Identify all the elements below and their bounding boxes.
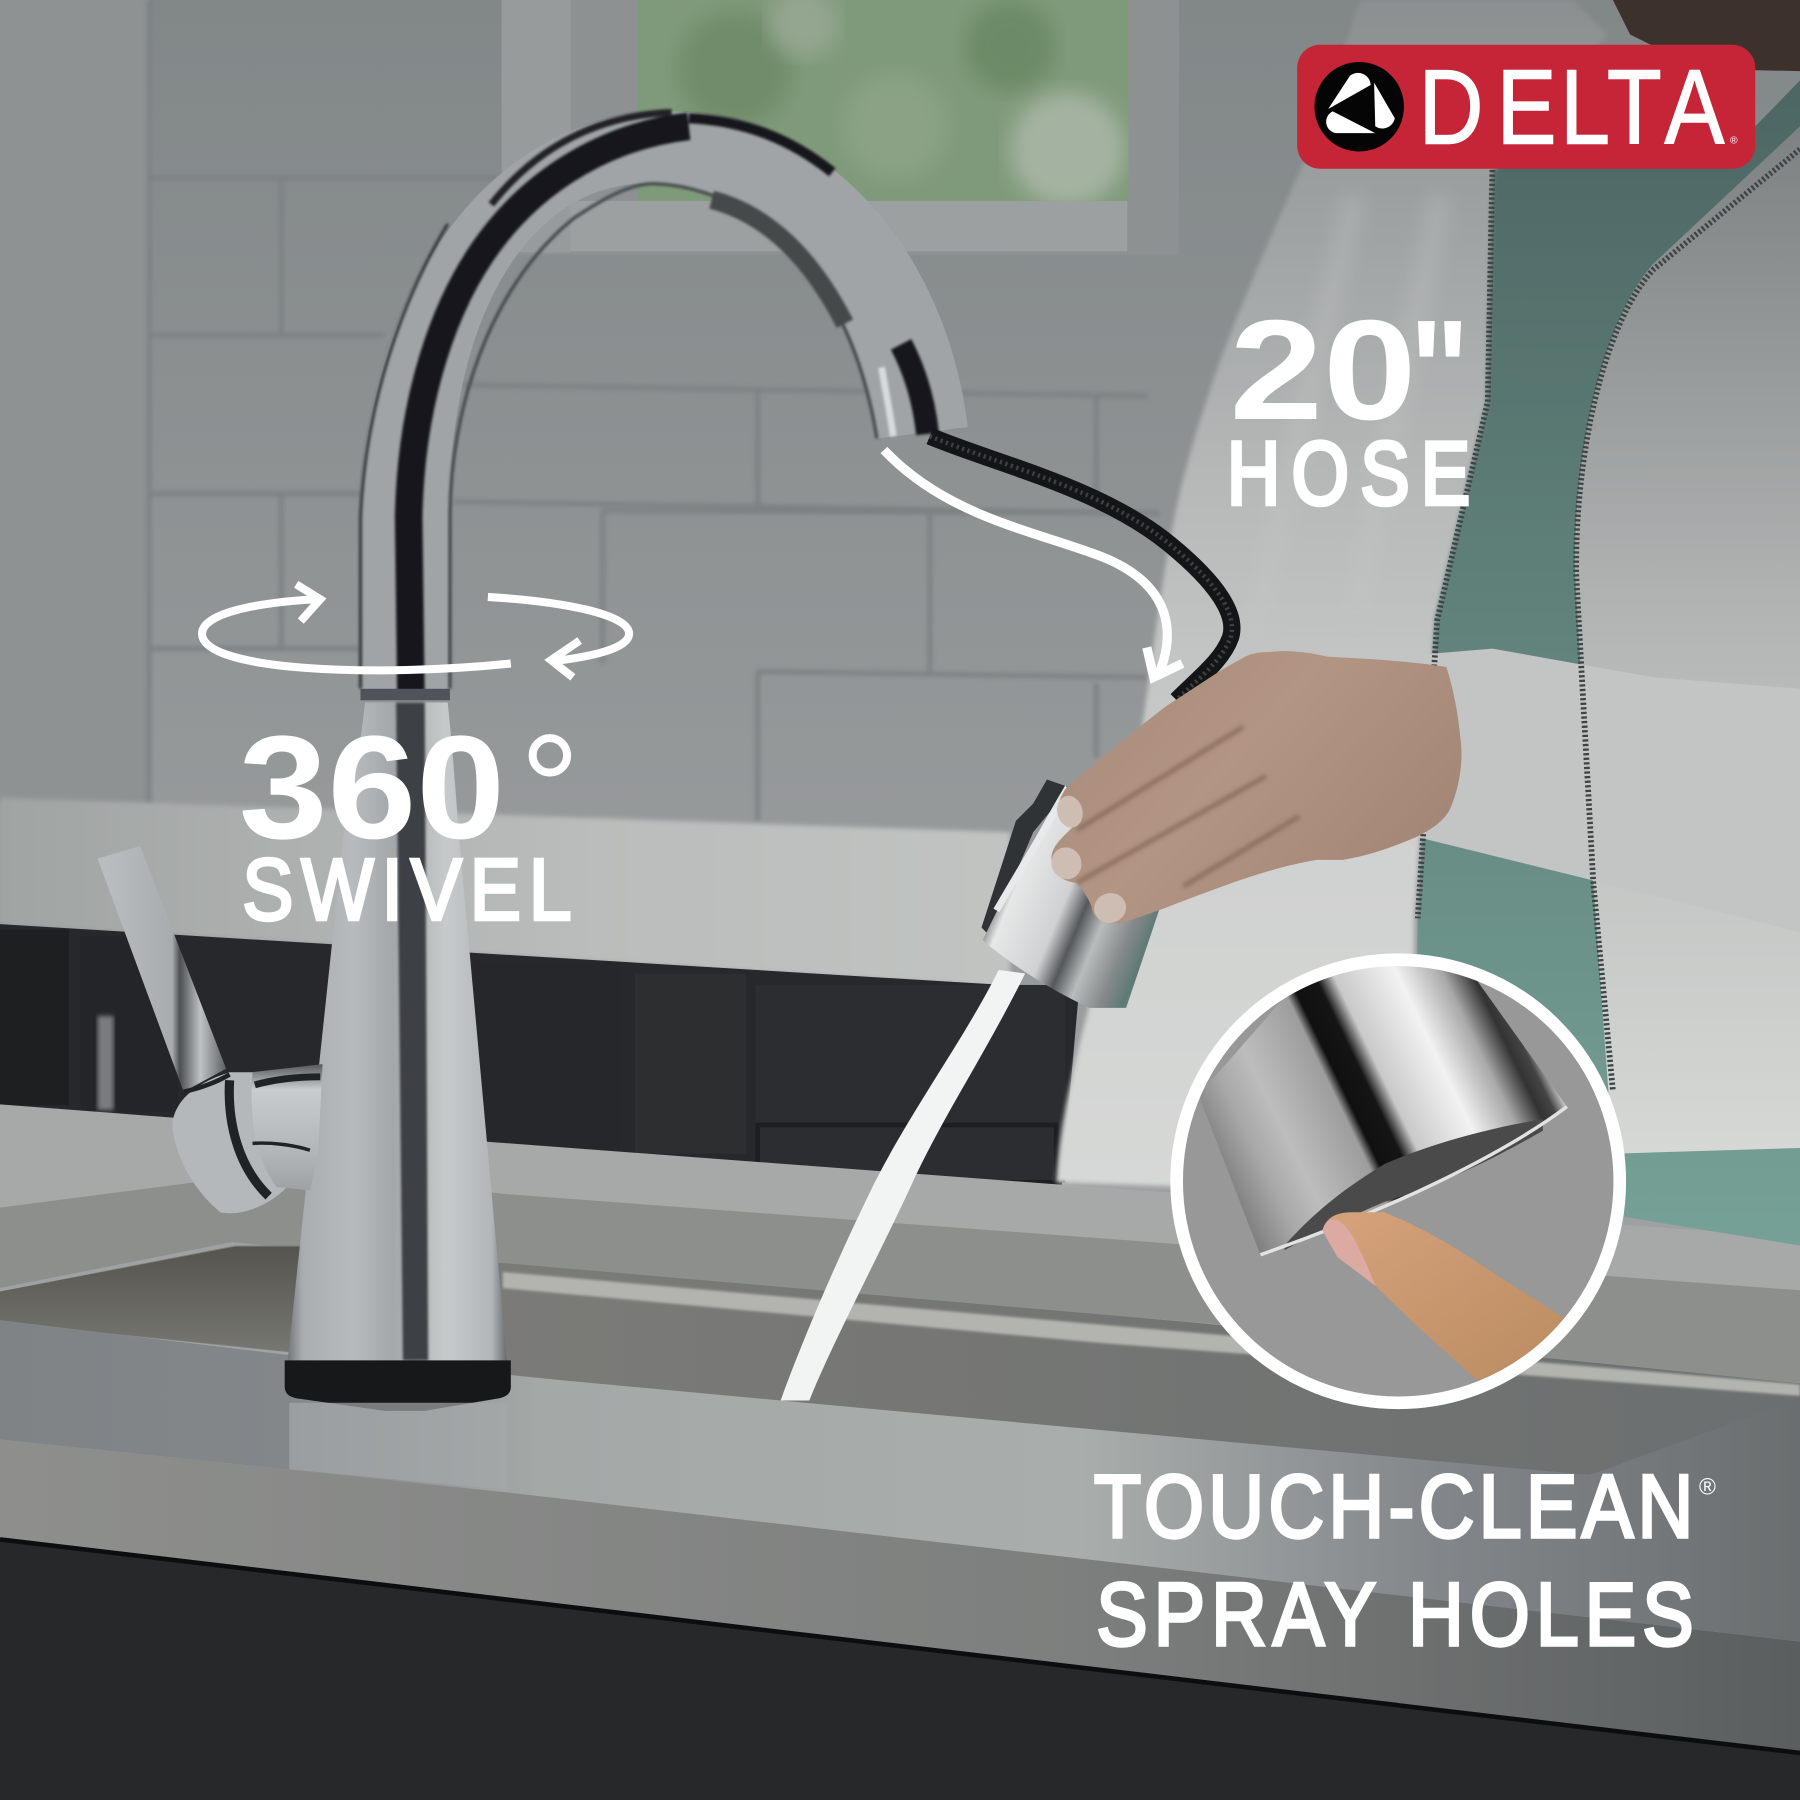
fingernails bbox=[1047, 793, 1130, 928]
text: 360 swivel: SWIVEL bbox=[242, 842, 572, 939]
body dark streak bbox=[396, 703, 428, 1360]
collar bbox=[360, 689, 450, 700]
hose bbox=[930, 436, 1232, 700]
window bbox=[637, 0, 1128, 207]
buttons bbox=[982, 779, 1070, 936]
spray head bbox=[982, 779, 1159, 1008]
spray head closeup bbox=[1198, 959, 1567, 1255]
back counter top surface bbox=[0, 1104, 1800, 1297]
person: hoodie, shirt and sleeve bbox=[1056, 0, 1800, 1246]
inch mark: " bbox=[1410, 291, 1469, 450]
zippers bbox=[1418, 149, 1800, 1091]
hoodie left panel bbox=[1056, 0, 1607, 1194]
arrows: swivel rotation bbox=[202, 584, 629, 677]
text: 360 swivel bbox=[239, 706, 572, 939]
lower dark cabinet bbox=[0, 1539, 1800, 1800]
lens ring bbox=[1177, 960, 1620, 1403]
logo registered mark: ® bbox=[1730, 135, 1738, 146]
water stream bbox=[781, 970, 1025, 1401]
fingertip bbox=[1322, 1212, 1567, 1389]
back counter bbox=[0, 798, 1010, 987]
text: touch-clean spray holes bbox=[1094, 1456, 1716, 1664]
sleeve bbox=[1412, 649, 1800, 932]
base bbox=[285, 1360, 511, 1411]
counter reflection bbox=[289, 1403, 507, 1490]
Delta logo: DELTA bbox=[1419, 48, 1725, 166]
handle details bbox=[184, 1074, 320, 1196]
handle hub bbox=[172, 1072, 287, 1213]
gooseneck spout bbox=[359, 111, 968, 698]
fingernail bbox=[1322, 1220, 1375, 1286]
sink basin bbox=[0, 1246, 1800, 1475]
text: touch-clean spray holes: SPRAY HOLES bbox=[1096, 1564, 1694, 1664]
registered mark: ® bbox=[1699, 1474, 1716, 1500]
head slider bbox=[996, 809, 1056, 910]
arrow: hose pull direction bbox=[884, 450, 1182, 677]
skin at neck bbox=[1613, 0, 1800, 71]
shirt bbox=[1414, 80, 1800, 1246]
spray face bbox=[1285, 1119, 1543, 1250]
spout reflections bbox=[360, 112, 928, 698]
front counter edge bbox=[0, 1440, 1800, 1754]
finger gaps bbox=[1077, 727, 1299, 886]
body cone bbox=[287, 703, 507, 1366]
hand bbox=[1047, 651, 1461, 928]
handle lever bbox=[98, 846, 226, 1092]
logo mark bbox=[1314, 62, 1404, 152]
text: 20 inch hose: 20 bbox=[1229, 291, 1417, 450]
degree symbol bbox=[533, 738, 567, 773]
spray rim bbox=[1260, 1107, 1567, 1255]
chrome head bbox=[983, 785, 1159, 1008]
zoomed lens: touch-clean spray holes bbox=[1177, 959, 1620, 1403]
text: 360 swivel: 360 bbox=[239, 706, 505, 870]
back counter front band bbox=[0, 1169, 1800, 1383]
handle cylinder bbox=[252, 1064, 323, 1190]
hoodie right panel bbox=[1575, 126, 1800, 1154]
dark cabinets bbox=[0, 924, 1079, 1185]
hoodie folds bbox=[1251, 195, 1441, 643]
front counter top bbox=[0, 1320, 1800, 1642]
Delta logo bbox=[1297, 45, 1755, 169]
text: 20 inch hose bbox=[1227, 291, 1470, 524]
text: touch-clean spray holes: TOUCH-CLEAN bbox=[1094, 1456, 1693, 1556]
faucet bbox=[98, 111, 968, 1490]
text: 20 inch hose: HOSE bbox=[1227, 424, 1470, 524]
